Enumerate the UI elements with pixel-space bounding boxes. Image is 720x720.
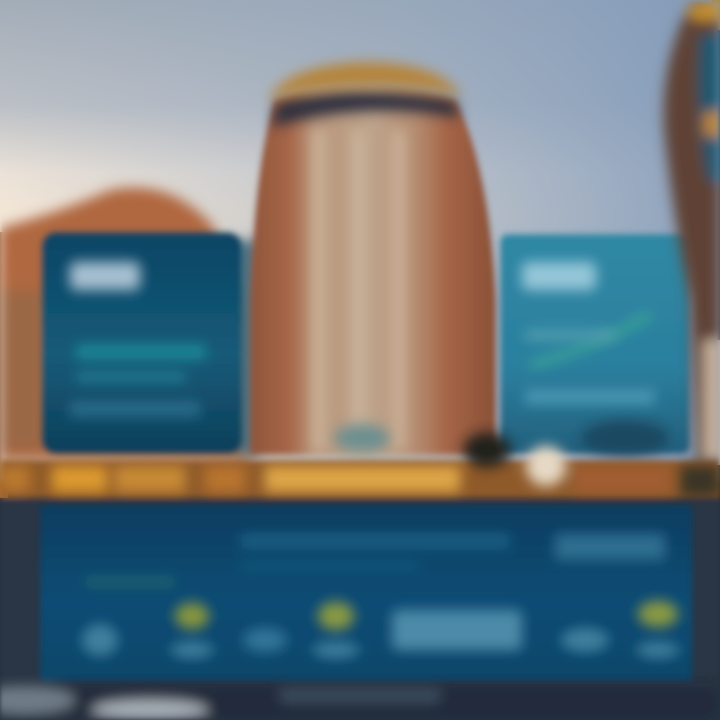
left billboard white block (70, 262, 140, 290)
right billboard dark base (580, 420, 670, 456)
right billboard white block (522, 262, 596, 290)
band lights (0, 432, 720, 497)
left billboard teal lines (70, 345, 206, 416)
bottom panel icon blobs (82, 601, 680, 658)
street foreground with light patches (0, 686, 720, 720)
left low-rise building (0, 188, 250, 460)
left billboard (42, 232, 242, 454)
bottom panel text rows (85, 534, 665, 586)
road and lower background (0, 500, 720, 720)
orange light band (0, 432, 720, 498)
bottom wide panel (40, 505, 692, 681)
tower body (250, 85, 496, 455)
right billboard panel (500, 234, 690, 454)
right edge tower (664, 0, 720, 465)
sky (0, 0, 720, 480)
right billboard lines (525, 330, 655, 404)
right billboard (500, 234, 690, 456)
tower vertical window stripes (312, 130, 406, 450)
right billboard green chart line (530, 315, 650, 365)
tower gold cap (268, 62, 462, 100)
tower dark band (272, 91, 460, 128)
gap between left billboard and tower (236, 240, 260, 455)
central tower (250, 62, 496, 455)
tower entrance (334, 424, 390, 452)
left billboard panel (42, 232, 242, 454)
